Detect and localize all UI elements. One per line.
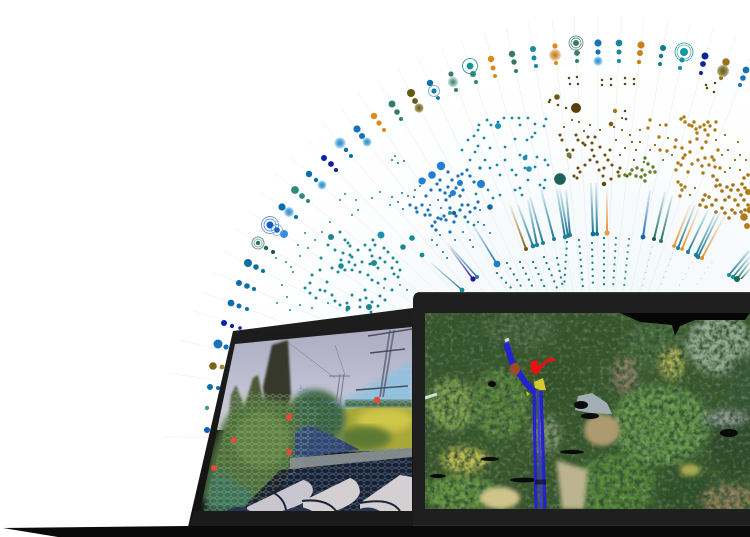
dark foliage texture bbox=[425, 313, 750, 509]
outer dots: blue and teal small triads bbox=[207, 45, 666, 390]
hedge mid bbox=[285, 390, 345, 446]
stems bbox=[430, 183, 750, 290]
sky bbox=[217, 327, 412, 430]
tree colour blobs bbox=[424, 313, 750, 515]
small trees bbox=[244, 374, 264, 408]
target ring: green bbox=[252, 237, 264, 249]
hex mesh over sky bbox=[325, 360, 412, 410]
brown and olive inner dot clusters bbox=[549, 77, 750, 229]
big bush bbox=[200, 398, 300, 500]
pipe sections bbox=[226, 475, 412, 511]
red markers bbox=[211, 397, 380, 471]
distant tree row bbox=[345, 400, 412, 407]
dark feature dots bbox=[554, 94, 581, 185]
field highlights bbox=[357, 408, 413, 432]
light foliage texture bbox=[425, 313, 750, 509]
outer dots: green bbox=[205, 40, 685, 410]
yellow points bbox=[526, 378, 546, 396]
base colour bbox=[425, 313, 750, 509]
outer dots: olive and brown bbox=[209, 58, 730, 370]
dark scan gaps bbox=[430, 381, 738, 482]
left laptop bbox=[188, 308, 415, 527]
blue dots centre left bbox=[410, 168, 480, 232]
hex mesh over vegetation bbox=[203, 390, 320, 511]
outer ring of data dots bbox=[204, 36, 749, 433]
blue pipeline route bbox=[506, 343, 546, 509]
dark pipeline mesh area bbox=[240, 457, 412, 511]
target ring: blue bbox=[262, 216, 282, 236]
orange brown dots right bbox=[648, 117, 720, 196]
brown dots upper sparse bbox=[549, 77, 715, 124]
field foreground bushes bbox=[339, 426, 391, 450]
dotted radial columns bbox=[497, 238, 712, 290]
pale blue point cloud haze bbox=[340, 362, 412, 409]
target ring: teal blue bbox=[428, 86, 440, 96]
lower blue foliage bbox=[205, 470, 260, 511]
blue and teal inner dot clusters bbox=[276, 118, 548, 312]
right laptop screen: aerial tree point cloud bbox=[424, 313, 750, 515]
right laptop lower edge bbox=[413, 525, 750, 527]
target ring: teal bbox=[462, 58, 478, 74]
target ring: large teal bbox=[675, 43, 693, 61]
top highlight edge bbox=[418, 292, 750, 293]
bare ground patches bbox=[480, 414, 700, 509]
yellow field bbox=[330, 404, 412, 452]
tapered stems with end dots bbox=[430, 183, 750, 292]
teal dots lower left bbox=[305, 232, 400, 312]
red points bbox=[531, 358, 556, 374]
white scan edges bbox=[425, 394, 437, 398]
pipe blue shadow area bbox=[295, 425, 360, 458]
left laptop bezel bbox=[188, 308, 413, 527]
right laptop bezel bbox=[413, 292, 750, 527]
brown dots centre bbox=[560, 135, 627, 179]
stem end dots bbox=[460, 230, 740, 292]
hex mesh over hedge and pipes bbox=[270, 385, 412, 511]
outer dots: orange bbox=[371, 41, 645, 132]
outer dots: glowing bbox=[280, 49, 729, 238]
left laptop screen: power lines photo bbox=[195, 320, 415, 511]
laptop base shadow strip bbox=[3, 526, 750, 537]
outer dots: bright blue bbox=[204, 39, 749, 433]
outer dots: navy bbox=[221, 52, 708, 330]
radial thin rays bbox=[163, 15, 750, 440]
brown red points bbox=[510, 363, 520, 375]
black gap at the top of the scan bbox=[620, 313, 750, 336]
dark poplar tree bbox=[263, 340, 291, 415]
gravel strip bbox=[290, 448, 412, 470]
right laptop bbox=[413, 292, 750, 527]
olive dots centre right bbox=[619, 158, 655, 181]
blue teal dots upper middle bbox=[462, 118, 548, 225]
pale roof bbox=[575, 393, 612, 414]
left laptop lower bezel shade bbox=[188, 511, 413, 527]
target ring: grey green bbox=[569, 36, 583, 50]
white route tip bbox=[505, 339, 509, 341]
transmission towers bbox=[289, 329, 412, 404]
bright roadside bush bbox=[234, 412, 290, 468]
